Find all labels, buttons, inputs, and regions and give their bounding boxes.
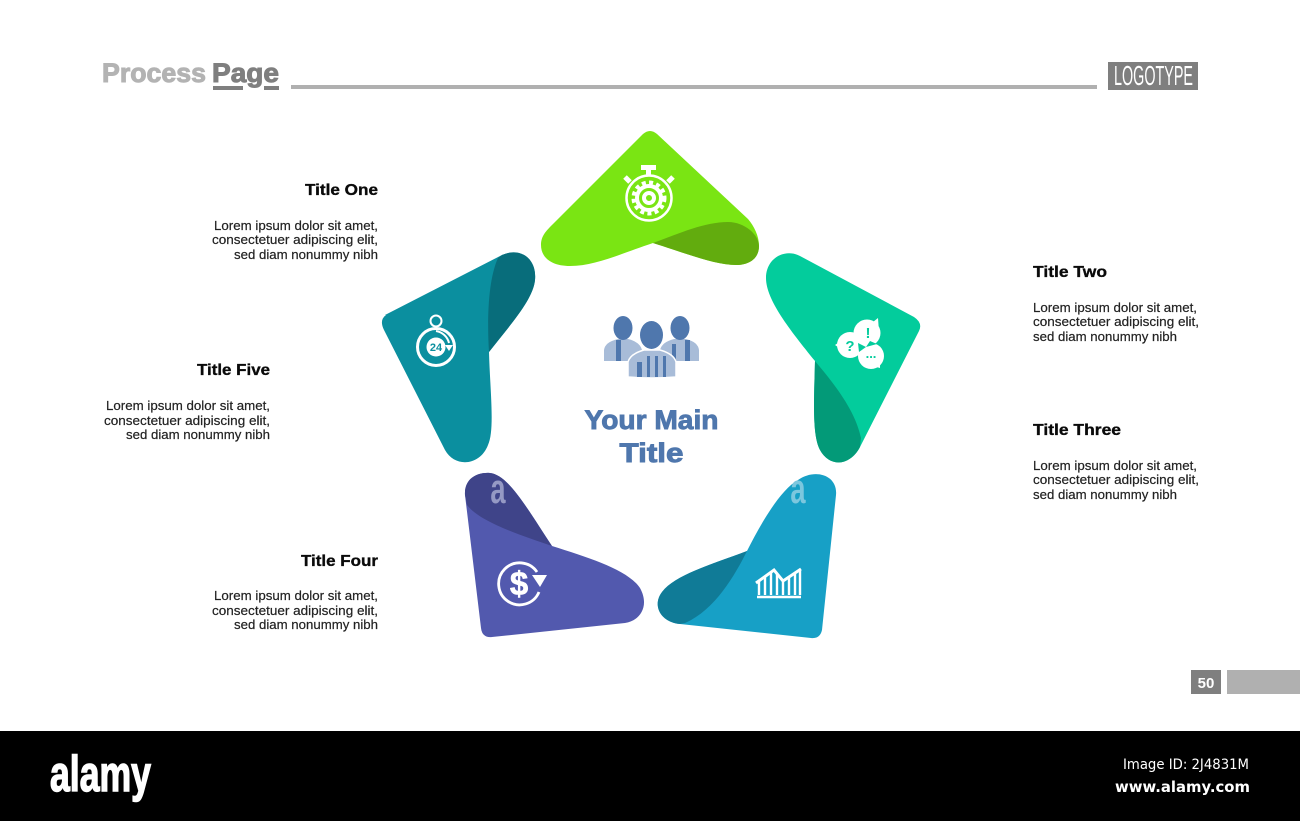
panel: title four text: Lorem ipsum dolor sit amet, xyxy=(214,588,378,603)
segment two: teal green xyxy=(766,253,920,462)
panel: title two text: Title Two xyxy=(1033,264,1107,281)
panel: title one text xyxy=(212,182,378,262)
logotype badge: LOGOTYPE xyxy=(1114,60,1193,91)
panel: title four text: sed diam nonummy nibh xyxy=(234,617,378,632)
panel: title one text: consectetuer adipiscing elit, xyxy=(212,232,378,247)
page number bar xyxy=(1227,670,1300,694)
panel: title one text: sed diam nonummy nibh xyxy=(234,247,378,262)
panel: title two text: sed diam nonummy nibh xyxy=(1033,329,1177,344)
icon: bar chart with trend line xyxy=(756,569,801,597)
watermark letter: a xyxy=(790,466,806,512)
icon: three speech bubbles: ... xyxy=(866,346,876,361)
logotype badge xyxy=(1108,60,1198,91)
panel: title three text: sed diam nonummy nibh xyxy=(1033,487,1177,502)
panel: title two text: Lorem ipsum dolor sit amet, xyxy=(1033,300,1197,315)
page number badge: 50 xyxy=(1198,675,1214,692)
panel: title five text: Title Five xyxy=(197,362,270,379)
page number badge xyxy=(1191,670,1221,694)
segment five: teal xyxy=(382,252,535,462)
panel: title three text: Title Three xyxy=(1033,422,1121,439)
panel: title five text: Lorem ipsum dolor sit amet, xyxy=(106,398,270,413)
panel: title one text: Title One xyxy=(305,182,378,199)
segment three: blue xyxy=(658,466,836,638)
center: main title: Title xyxy=(620,438,684,468)
icon: stopwatch gear xyxy=(625,165,673,220)
panel: title five text: consectetuer adipiscing elit, xyxy=(104,413,270,428)
segment four: purple xyxy=(465,466,644,637)
center: main title xyxy=(584,405,718,468)
icon: three speech bubbles: ? xyxy=(845,338,855,355)
header rule xyxy=(291,85,1097,89)
panel: title one text: Lorem ipsum dolor sit amet, xyxy=(214,218,378,233)
panel: title three text xyxy=(1033,422,1199,502)
panel: title three text: Lorem ipsum dolor sit amet, xyxy=(1033,458,1197,473)
panel: title four text xyxy=(212,553,378,632)
panel: title four text: Title Four xyxy=(301,553,378,570)
footer band xyxy=(0,731,1300,821)
icon: three speech bubbles xyxy=(835,318,884,369)
icon: dollar refresh: $ xyxy=(510,565,528,602)
icon: three speech bubbles: ! xyxy=(866,325,870,342)
header: process page title: Page xyxy=(212,58,279,88)
panel: title two text xyxy=(1033,264,1199,344)
icon: 24 hour stopwatch xyxy=(418,316,454,366)
panel: title five text xyxy=(104,362,270,442)
center: main title: Your Main xyxy=(584,405,718,435)
icon: dollar refresh xyxy=(499,563,547,605)
header: process page title: Process xyxy=(102,58,206,88)
footer: website: www.alamy.com xyxy=(1115,778,1250,796)
segment one: green xyxy=(541,131,759,266)
footer: alamy logo: alamy xyxy=(50,746,151,802)
icon: 24 hour stopwatch: 24 xyxy=(430,342,443,354)
center: team icon xyxy=(604,316,699,378)
watermark letter: a xyxy=(490,466,506,512)
panel: title five text: sed diam nonummy nibh xyxy=(126,427,270,442)
panel: title three text: consectetuer adipiscing elit, xyxy=(1033,472,1199,487)
footer: image id: Image ID: 2J4831M xyxy=(1123,757,1249,773)
panel: title four text: consectetuer adipiscing elit, xyxy=(212,603,378,618)
header: process page title xyxy=(102,58,279,90)
panel: title two text: consectetuer adipiscing elit, xyxy=(1033,314,1199,329)
